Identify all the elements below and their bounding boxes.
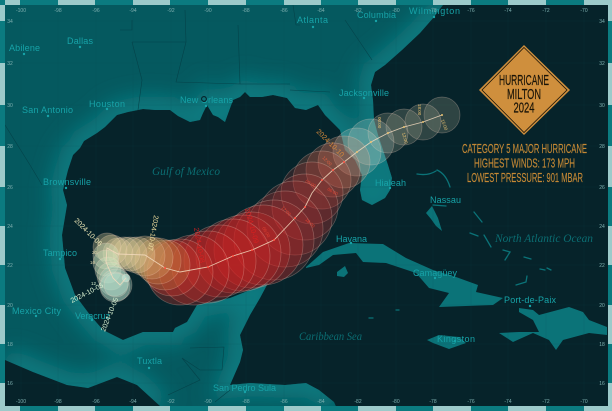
- sea labels: [152, 164, 593, 343]
- city dots: [23, 16, 531, 393]
- track date labels: 2024-10-10: [315, 128, 345, 159]
- axis tick labels: 18: [7, 342, 13, 348]
- city labels: Tuxtla: [137, 356, 162, 366]
- axis tick labels: -88: [242, 399, 250, 405]
- city labels: Veracruz: [75, 311, 110, 321]
- track date labels: 12:00: [321, 155, 333, 167]
- axis tick labels: 24: [599, 224, 605, 230]
- city labels: Jacksonville: [339, 88, 389, 98]
- track date labels: 2024-10-06: [73, 217, 103, 248]
- city labels: Wilmington: [409, 6, 460, 16]
- axis tick labels: 18: [599, 342, 605, 348]
- axis tick labels: -80: [392, 8, 400, 14]
- storm wind-field circles: [93, 97, 460, 305]
- axis tick labels: -84: [317, 399, 325, 405]
- axis tick labels: -98: [54, 399, 62, 405]
- track date labels: 00:00: [304, 179, 317, 189]
- axis tick labels: 16: [599, 381, 605, 387]
- axis tick labels: 32: [599, 61, 605, 67]
- axis tick labels: -86: [280, 399, 288, 405]
- axis tick labels: -74: [504, 8, 512, 14]
- city labels: Kingston: [437, 334, 475, 344]
- axis tick labels: -90: [204, 399, 212, 405]
- axis tick labels: 30: [7, 103, 13, 109]
- city labels: Nassau: [430, 195, 461, 205]
- axis tick labels: -72: [542, 8, 550, 14]
- warning sign: hurricane title: HURRICANE: [499, 72, 549, 89]
- city labels: Port-de-Paix: [504, 295, 556, 305]
- axis tick labels: -82: [354, 399, 362, 405]
- track date labels: 06:00: [261, 226, 271, 239]
- city labels: Atlanta: [297, 15, 328, 25]
- small islands: [369, 170, 551, 318]
- city labels: Camagüey: [413, 268, 458, 278]
- axis tick labels: -70: [580, 399, 588, 405]
- axis tick labels: 30: [599, 103, 605, 109]
- axis tick labels: -92: [167, 399, 175, 405]
- track date labels: 12:00: [280, 205, 292, 217]
- axis tick labels: 28: [599, 144, 605, 150]
- axis tick labels: 24: [7, 224, 13, 230]
- axis tick labels: -84: [317, 8, 325, 14]
- track date labels: 2024-10-05: [100, 297, 120, 333]
- axis tick labels: -96: [92, 8, 100, 14]
- axis tick labels: 22: [599, 263, 605, 269]
- sea labels: Caribbean Sea: [299, 329, 362, 343]
- city labels: New Orleans: [180, 95, 234, 105]
- axis tick labels: -96: [92, 399, 100, 405]
- axis tick labels: -80: [392, 399, 400, 405]
- axis tick labels: -98: [54, 8, 62, 14]
- city labels: Abilene: [9, 43, 40, 53]
- city labels: Brownsville: [43, 177, 91, 187]
- track date labels: 2024-10-08: [192, 227, 205, 264]
- city labels: Dallas: [67, 36, 94, 46]
- city labels: Hialeah: [375, 178, 406, 188]
- track date labels: 2024-10-07: [146, 215, 159, 251]
- axis tick labels: 20: [599, 303, 605, 309]
- axis tick labels: 22: [7, 263, 13, 269]
- track date labels: 12:00: [401, 132, 409, 145]
- city labels: Tampico: [43, 248, 77, 258]
- storm track line: [106, 114, 443, 285]
- axis tick labels: -100: [16, 399, 26, 405]
- axis tick labels: -78: [429, 8, 437, 14]
- axis tick labels: 16: [7, 381, 13, 387]
- axis tick labels: -70: [580, 8, 588, 14]
- city labels: Columbia: [357, 10, 396, 20]
- axis tick labels: 28: [7, 144, 13, 150]
- axis tick labels: -86: [280, 8, 288, 14]
- storm statistics: [462, 141, 587, 185]
- axis tick labels: -100: [16, 8, 26, 14]
- axis tick labels: 26: [599, 185, 605, 191]
- axis tick labels: 20: [7, 303, 13, 309]
- axis tick labels: 32: [7, 61, 13, 67]
- track date labels: 18:00: [417, 104, 422, 116]
- warning sign: hurricane title: MILTON: [507, 86, 541, 103]
- axis tick labels: -72: [542, 399, 550, 405]
- axis tick labels: 26: [7, 185, 13, 191]
- city labels: Mexico City: [12, 306, 62, 316]
- axis tick labels: -76: [467, 8, 475, 14]
- track date labels: 18:00: [304, 217, 316, 229]
- axis tick labels: -76: [467, 399, 475, 405]
- track date labels: 00:00: [377, 117, 382, 129]
- sea labels: Gulf of Mexico: [152, 164, 220, 178]
- city labels: Havana: [336, 234, 367, 244]
- axis tick labels: 34: [599, 19, 605, 25]
- warning sign: hurricane title: 2024: [514, 100, 534, 116]
- track date labels: 2024-10-09: [243, 208, 259, 244]
- track date labels: 2024-10-05: [70, 282, 105, 305]
- axis tick labels: -74: [504, 399, 512, 405]
- track date labels: 20: [92, 250, 98, 255]
- sea labels: North Atlantic Ocean: [494, 231, 593, 245]
- track date labels: 06:00: [326, 187, 339, 197]
- axis tick labels: -94: [129, 399, 137, 405]
- axis tick labels: 34: [7, 19, 13, 25]
- axis tick labels: -92: [167, 8, 175, 14]
- axis tick labels: -78: [429, 399, 437, 405]
- warning sign: hurricane title: [479, 45, 570, 135]
- track date labels: 16: [90, 260, 96, 265]
- track date labels: [70, 104, 449, 333]
- axis tick labels: -88: [242, 8, 250, 14]
- city labels: San Pedro Sula: [213, 383, 276, 393]
- city labels: Houston: [89, 99, 125, 109]
- city labels: San Antonio: [22, 105, 73, 115]
- axis tick labels: -82: [354, 8, 362, 14]
- axis tick labels: -90: [204, 8, 212, 14]
- axis tick labels: -94: [129, 8, 137, 14]
- track date labels: 12: [91, 281, 97, 286]
- track date labels: 15:00: [440, 119, 449, 131]
